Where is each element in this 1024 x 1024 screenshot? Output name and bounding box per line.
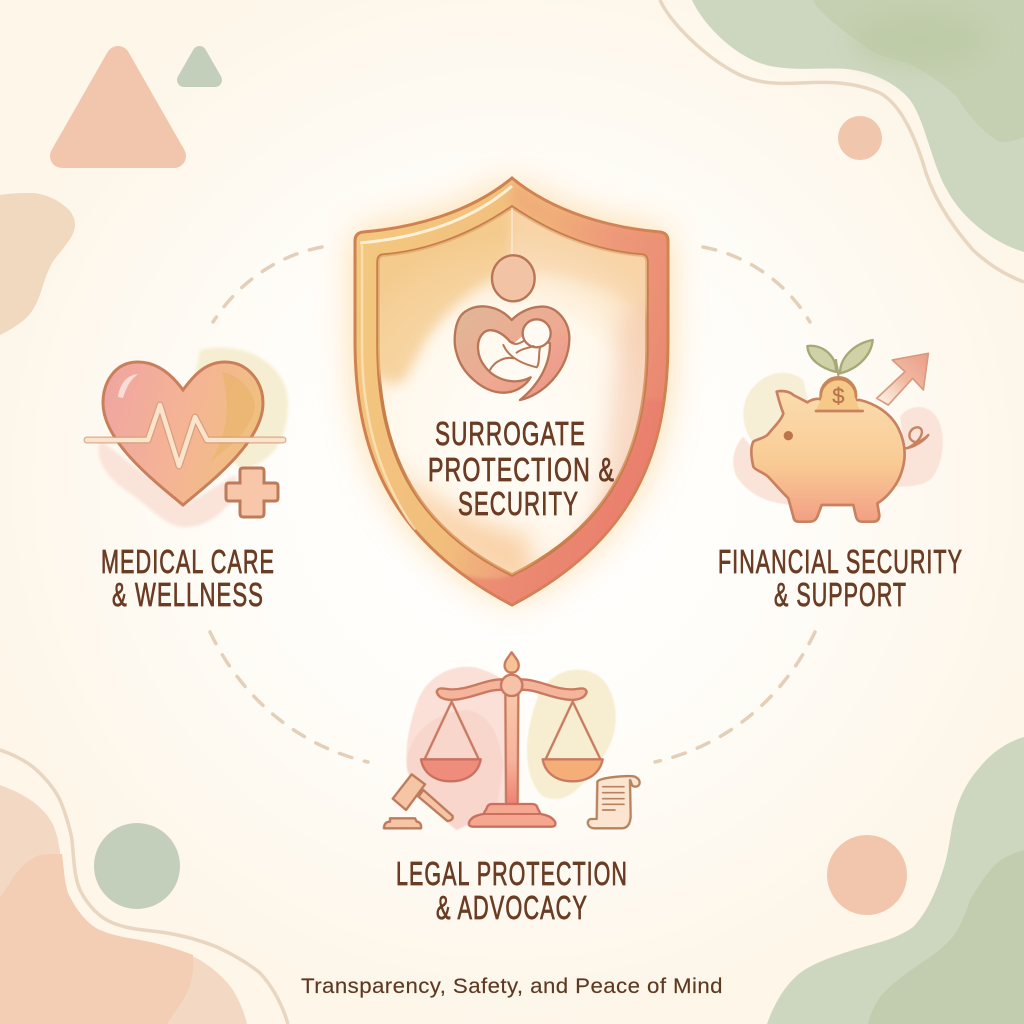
scroll [588,776,640,828]
pig body [751,391,905,522]
mother head [492,255,535,301]
decoration: large peach triangle [62,58,174,156]
right pan [543,759,603,781]
pig eye [784,431,793,440]
beam [437,679,587,700]
panel: financial security [718,340,963,613]
medical label: & WELLNESS [112,576,264,613]
panel: legal protection [384,652,640,926]
gavel [384,774,453,828]
finial [505,652,519,673]
watercolor blobs behind scales [406,667,616,830]
decoration: bottom left peach blob [0,750,288,1024]
shield title: PROTECTION & [428,451,615,488]
base [469,804,555,827]
legal label [396,855,628,926]
shield inner field [378,207,647,575]
pig tail [905,427,928,448]
decoration: bottom right peach dot [827,835,907,915]
heart [103,362,263,505]
decoration: top right green blob [660,0,1024,282]
connector: dashed top right arc [703,247,810,322]
decoration: small green triangle [184,53,215,80]
decoration: green dot [94,823,180,909]
right chains [546,702,600,758]
decoration: top right peach dot [838,116,882,160]
connector: dashed bottom right arc [655,632,815,762]
beam hub [501,675,522,696]
connector: dashed top left arc [213,247,322,322]
watercolor blobs behind pig [733,373,943,505]
financial label: & SUPPORT [774,576,907,613]
footer tagline: Transparency, Safety, and Peace of Mind [301,975,723,998]
left chains [425,702,478,758]
piggy bank icon [733,340,943,522]
heart highlight [118,374,138,398]
legal label: & ADVOCACY [436,889,588,926]
scales of justice icon [384,652,640,830]
heartbeat line [87,405,283,466]
medical label [101,543,275,613]
left pan [421,759,481,781]
scroll lines [603,787,624,810]
medical plus [226,468,278,517]
decoration: left tan blob [0,193,75,335]
icon: mother and baby [455,255,569,400]
coin overlap and slot [816,385,860,411]
growth arrow [877,353,928,405]
financial label [718,543,963,613]
central shield [355,178,668,605]
shield title: SURROGATE [435,415,586,452]
shield watercolor washes [378,207,647,575]
shield glow [358,185,665,598]
mother arms forming a heart [455,306,569,400]
shield title [428,415,615,522]
leaves [807,340,873,375]
legal label: LEGAL PROTECTION [396,855,628,892]
coin [821,377,856,413]
shield title: SECURITY [458,485,579,522]
shield rim highlights [360,178,668,605]
shield outer rim [355,178,668,605]
pillar [505,693,518,804]
panel: medical care [87,347,288,613]
watercolor blobs behind heart [99,347,288,527]
baby [490,319,551,370]
connector: dashed bottom left arc [210,632,368,762]
medical label: MEDICAL CARE [101,543,275,580]
decoration: bottom right green blob [767,737,1024,1024]
dollar sign: $ [832,383,844,408]
heart shading [210,372,255,462]
